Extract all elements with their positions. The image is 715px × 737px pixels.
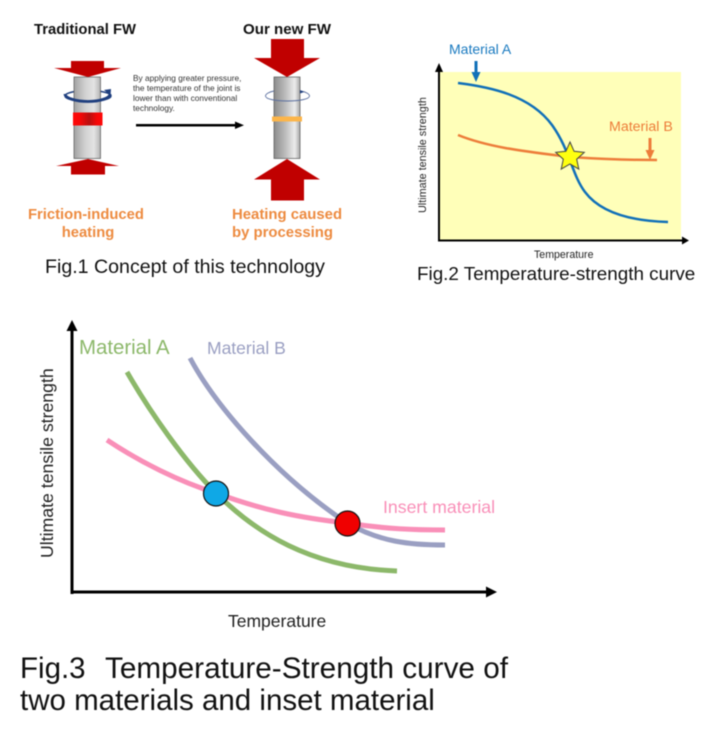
label: Material A: Material A xyxy=(79,337,170,359)
text: explanation: By applying greater pressure, xyxy=(133,73,241,83)
caption: Fig.3: Temperature-Strength curve of xyxy=(105,652,509,685)
label: Material A: Material A xyxy=(449,41,512,57)
label: x axis: Temperature xyxy=(228,611,326,631)
panel: Fig.3 curve of two materials and insert xyxy=(20,320,516,717)
label: x axis: Temperature xyxy=(534,249,594,261)
text: friction-induced heating: Friction-induced xyxy=(28,207,144,223)
text: explanation: the temperature of the joint is xyxy=(133,83,240,93)
marker: red joint point xyxy=(335,511,360,536)
text: heating caused by processing: by processing xyxy=(232,225,333,241)
curve: Insert material xyxy=(107,440,445,530)
text: friction-induced heating: heating xyxy=(62,225,114,241)
arrow: Material B marker xyxy=(646,138,654,160)
panel: Fig.2 temperature-strength curve xyxy=(417,41,695,284)
caption: Fig.3: Fig.3 xyxy=(20,652,86,685)
heading: Our new FW: Our new FW xyxy=(243,21,332,38)
curve: Material B xyxy=(458,135,657,160)
caption: Fig.2: Fig.2 Temperature-strength curve xyxy=(417,263,695,284)
marker: blue joint point xyxy=(204,481,228,506)
text: heating caused by processing: Heating caused xyxy=(232,207,342,223)
text: explanation: lower than with conventional xyxy=(133,93,237,103)
panel: Fig.1 concept of this technology xyxy=(28,21,346,278)
caption: Fig.1: Fig.1 Concept of this technology xyxy=(45,256,325,278)
label: Insert material: Insert material xyxy=(383,497,495,517)
label: y axis: Ultimate tensile strength xyxy=(417,97,429,213)
label: y axis: Ultimate tensile strength xyxy=(37,368,57,558)
chart axes xyxy=(66,320,497,598)
icon: star intersection xyxy=(556,142,584,169)
icon: traditional friction weld cylinder xyxy=(54,61,121,174)
curve: Material A xyxy=(127,372,397,571)
arrow: Material A marker xyxy=(472,61,480,82)
label: Material B: Material B xyxy=(609,119,673,135)
chart axes xyxy=(435,63,689,244)
curve: Material B xyxy=(190,358,445,545)
label: Material B: Material B xyxy=(207,338,286,358)
icon: new friction weld cylinder xyxy=(254,39,320,200)
chart background xyxy=(439,72,681,240)
curve: Material A xyxy=(458,83,668,222)
caption: Fig.3: two materials and inset material xyxy=(20,684,435,717)
heading: Traditional FW: Traditional FW xyxy=(34,22,136,38)
arrow: traditional to new xyxy=(136,122,244,129)
text: explanation: technology. xyxy=(133,103,175,113)
